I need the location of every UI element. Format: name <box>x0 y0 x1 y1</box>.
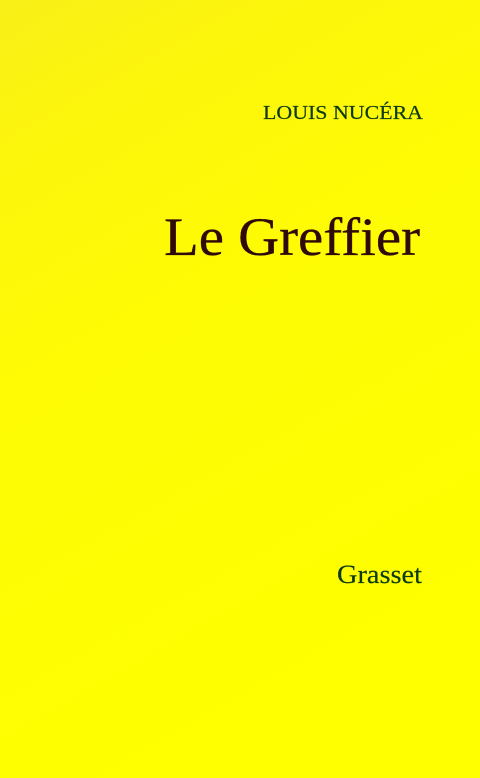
book title: Le Greffier <box>164 207 420 267</box>
author name: LOUIS NUCÉRA <box>263 101 424 124</box>
publisher: Grasset <box>337 560 423 589</box>
